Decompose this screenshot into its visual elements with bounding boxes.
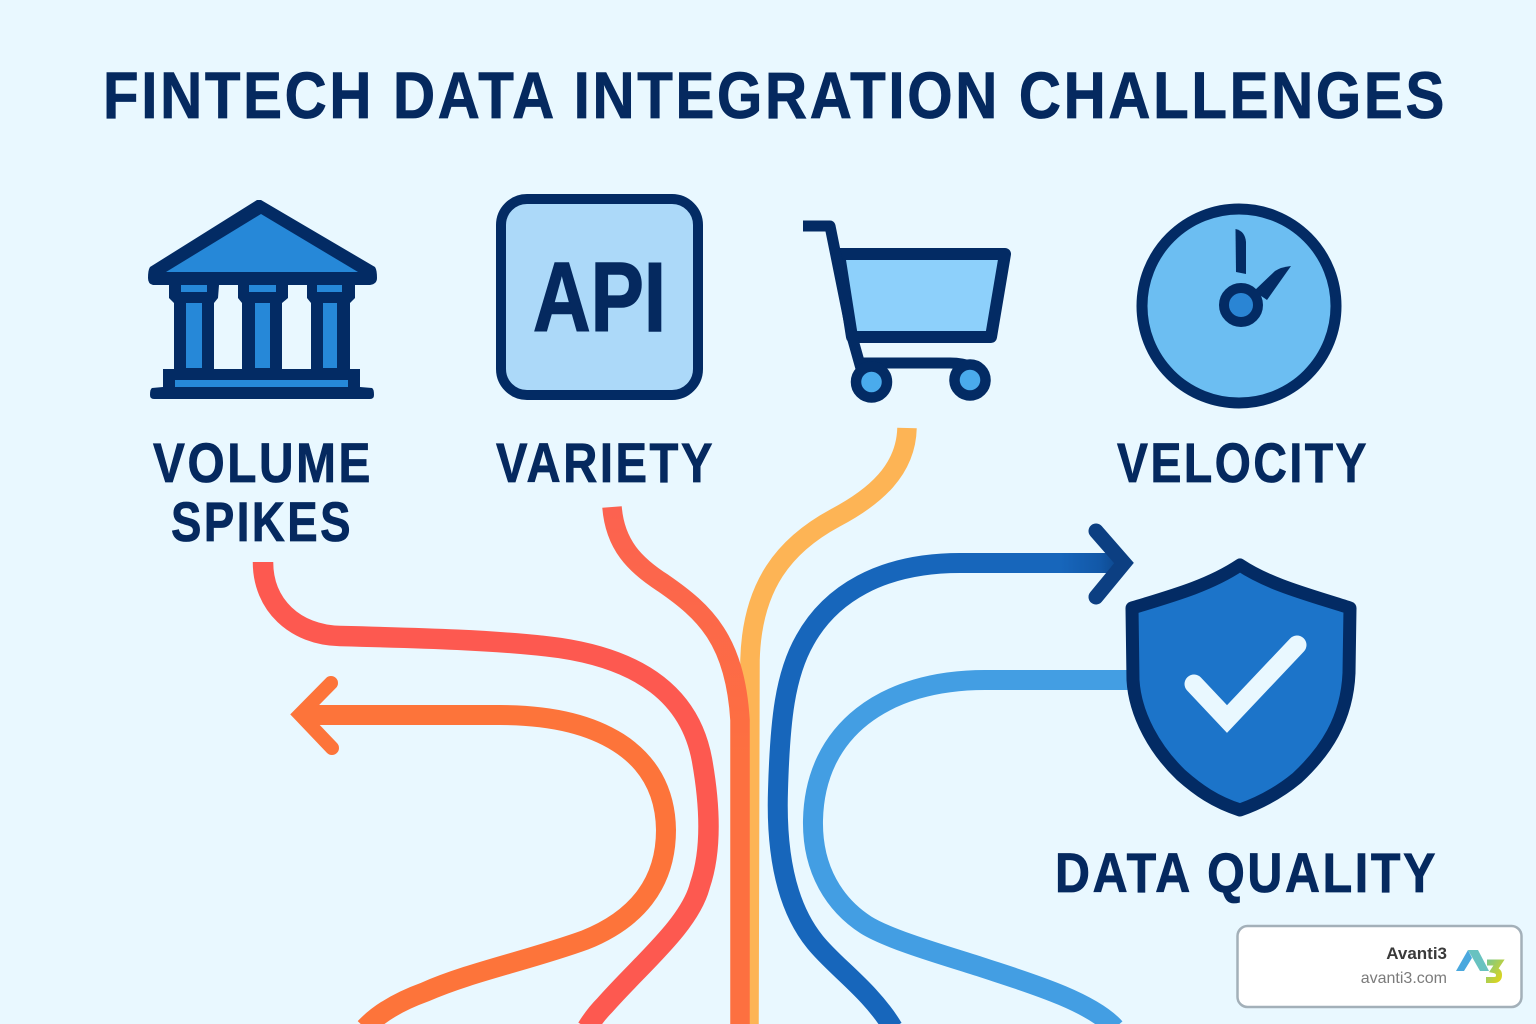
label: variety: VARIETY (496, 432, 715, 494)
flow line: yellow from cart (749, 428, 907, 1024)
flow line: variety (red-orange) (612, 507, 740, 1024)
icon: bank (148, 200, 377, 399)
flow line: volume spikes (red) (263, 562, 708, 1024)
label: volume spikes (153, 432, 373, 553)
badge: Avanti3 (1238, 926, 1522, 1007)
icon: clock (1142, 209, 1336, 403)
icon: A3 logo (1456, 950, 1499, 980)
icon: shield with check (1132, 565, 1350, 810)
flow arrow: orange left (300, 683, 666, 1024)
badge: Avanti3: avanti3.com (1361, 970, 1447, 987)
icon: API box (501, 199, 698, 395)
label: velocity: VELOCITY (1117, 432, 1369, 494)
icon: shopping cart (803, 226, 1005, 398)
label: data quality: DATA QUALITY (1055, 842, 1438, 904)
icon: API box: API (533, 242, 666, 352)
badge: Avanti3: Avanti3 (1386, 944, 1447, 963)
flow arrow: blue to data quality (778, 531, 1124, 1024)
label: volume spikes: SPIKES (171, 491, 353, 553)
flow line: light blue from shield (813, 680, 1130, 1024)
label: volume spikes: VOLUME (153, 432, 373, 494)
